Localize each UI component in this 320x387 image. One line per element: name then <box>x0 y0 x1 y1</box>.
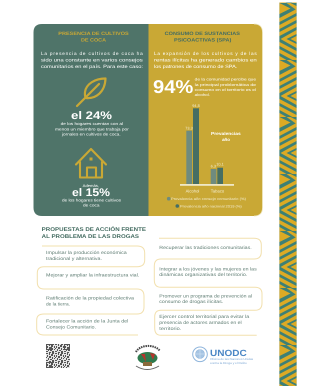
bar chart: prevalencia: 73,3 <box>185 126 193 130</box>
stat: el 15%: de coca <box>83 202 100 208</box>
text block: intro coca <box>41 51 144 69</box>
stat: el 24%: jornales en cultivos de coca. <box>61 132 121 136</box>
logo: UNODC: contra la Droga y el Delito <box>210 361 247 365</box>
bar chart: prevalencia: Alcohol <box>186 189 199 194</box>
logo: UNODC <box>193 347 254 365</box>
icon: house <box>76 149 106 178</box>
stat: 94%: la principal problemática de <box>195 83 256 87</box>
bar chart: prevalencia: 6,3 <box>211 164 216 168</box>
stat: el 24%: menos un miembro que trabaja por <box>55 126 130 131</box>
bar chart: prevalencia: Tabaco <box>211 189 225 194</box>
text: proposals left: Consejo Comunitario. <box>46 324 96 329</box>
stat: 94% <box>153 76 256 97</box>
heading: presencia de cultivos: DE COCA <box>81 38 107 44</box>
text: proposals right: Ejercer control territorial para evitar la <box>159 314 250 319</box>
text block: intro consumo: los patrones de consumo de SPA. <box>154 64 237 69</box>
bar chart: prevalencia: 10,1 <box>216 163 224 167</box>
heading: consumo de sustancias <box>165 31 241 44</box>
bar chart: prevalencia <box>167 104 246 208</box>
text: proposals right: Integrar a los jóvenes y las mujeres en las <box>159 266 257 271</box>
chart legend: Prevalencia año nacional 2019 (%) <box>180 204 242 208</box>
stat: 94%: consumo en el territorio es el <box>195 88 256 92</box>
chart label: prevalencias año: Prevalencias <box>211 131 241 136</box>
logo: UNODC: UNODC <box>210 348 247 358</box>
chart label: prevalencias año <box>211 131 241 142</box>
text block: intro consumo <box>154 51 257 69</box>
panel: propuestas columna izquierda <box>37 246 145 335</box>
text block: intro coca: comunitarios en el país. Para este caso: <box>41 64 143 69</box>
text: proposals right: Recuperar las tradiciones comunitarias. <box>159 245 252 250</box>
text block: intro consumo: La expansión de los cultivos y de las <box>154 51 257 56</box>
chart legend: Prevalencia año consejo comunitario (%) <box>171 197 246 201</box>
text block: intro coca: La presencia de cultivos de coca ha <box>41 51 143 56</box>
icon: leaf <box>77 78 106 106</box>
text: proposals left: Fortalecer la acción de la Junta del <box>46 318 128 323</box>
stat: el 15% <box>62 183 121 208</box>
text: proposals right: dinámicas organizativas del territorio. <box>159 272 247 277</box>
stat: 94%: 94% <box>153 76 193 97</box>
text: proposals left <box>46 250 139 329</box>
text: proposals left: de la tierra. <box>46 301 70 306</box>
heading: presencia de cultivos: PRESENCIA DE CULTIVOS <box>58 31 130 37</box>
text: proposals right: Promover un programa de prevención al <box>159 293 252 298</box>
bar chart: prevalencia: 94,8 <box>192 104 200 108</box>
text: proposals right: presencia de actores armados en el <box>159 320 242 325</box>
text: proposals left: Ratificación de la propiedad colectiva <box>46 295 135 300</box>
chart legend <box>167 197 246 208</box>
logo: UNODC: Oficina de las Naciones Unidas <box>210 357 254 361</box>
heading: consumo de sustancias: CONSUMO DE SUSTANCIAS <box>165 31 241 37</box>
chart label: prevalencias año: año <box>222 137 230 142</box>
stat: el 15%: de los hogares tiene cultivos <box>62 198 121 202</box>
text: proposals left: tradicional y alternativa. <box>46 256 102 261</box>
panel: propuestas columna derecha <box>154 238 262 335</box>
stat: el 24%: el 24% <box>71 110 112 122</box>
heading: propuestas de acción: PROPUESTAS DE ACCIÓN FRENTE <box>42 226 146 233</box>
panel: presencia de cultivos de coca <box>34 24 148 216</box>
stat: el 15%: el 15% <box>72 187 110 199</box>
text block: intro coca: sido una constante en varios consejos <box>41 58 144 62</box>
heading: propuestas de acción: AL PROBLEMA DE LAS DROGAS <box>42 234 139 240</box>
stat: el 24% <box>55 110 130 136</box>
logo: consejo comunitario <box>136 346 160 370</box>
panel: consumo de sustancias psicoactivas <box>148 24 262 216</box>
heading: presencia de cultivos <box>58 31 130 44</box>
icon: QR code <box>46 344 70 368</box>
stat: 94%: alcohol. <box>195 93 210 97</box>
stat: el 15%: Además, <box>83 183 99 188</box>
heading: consumo de sustancias: PSICOACTIVAS (SPA) <box>174 38 232 44</box>
text: proposals right: consumo de drogas ilícitas. <box>159 299 223 304</box>
side pattern strip <box>279 2 297 386</box>
text: proposals left: Impulsar la producción económica <box>46 250 127 255</box>
text: proposals left: Mejorar y ampliar la infraestructura vial. <box>46 273 139 278</box>
text: proposals right <box>159 245 257 331</box>
icon: UN emblem <box>193 347 207 362</box>
stat: 94%: de la comunidad percibe que <box>195 78 256 82</box>
text: proposals right: territorio. <box>159 326 181 331</box>
stat: el 24%: de los hogares cuentan con al <box>61 121 123 126</box>
text block: intro consumo: rentas ilícitas ha generado cambios en <box>154 58 257 62</box>
heading: propuestas de acción <box>42 226 146 240</box>
